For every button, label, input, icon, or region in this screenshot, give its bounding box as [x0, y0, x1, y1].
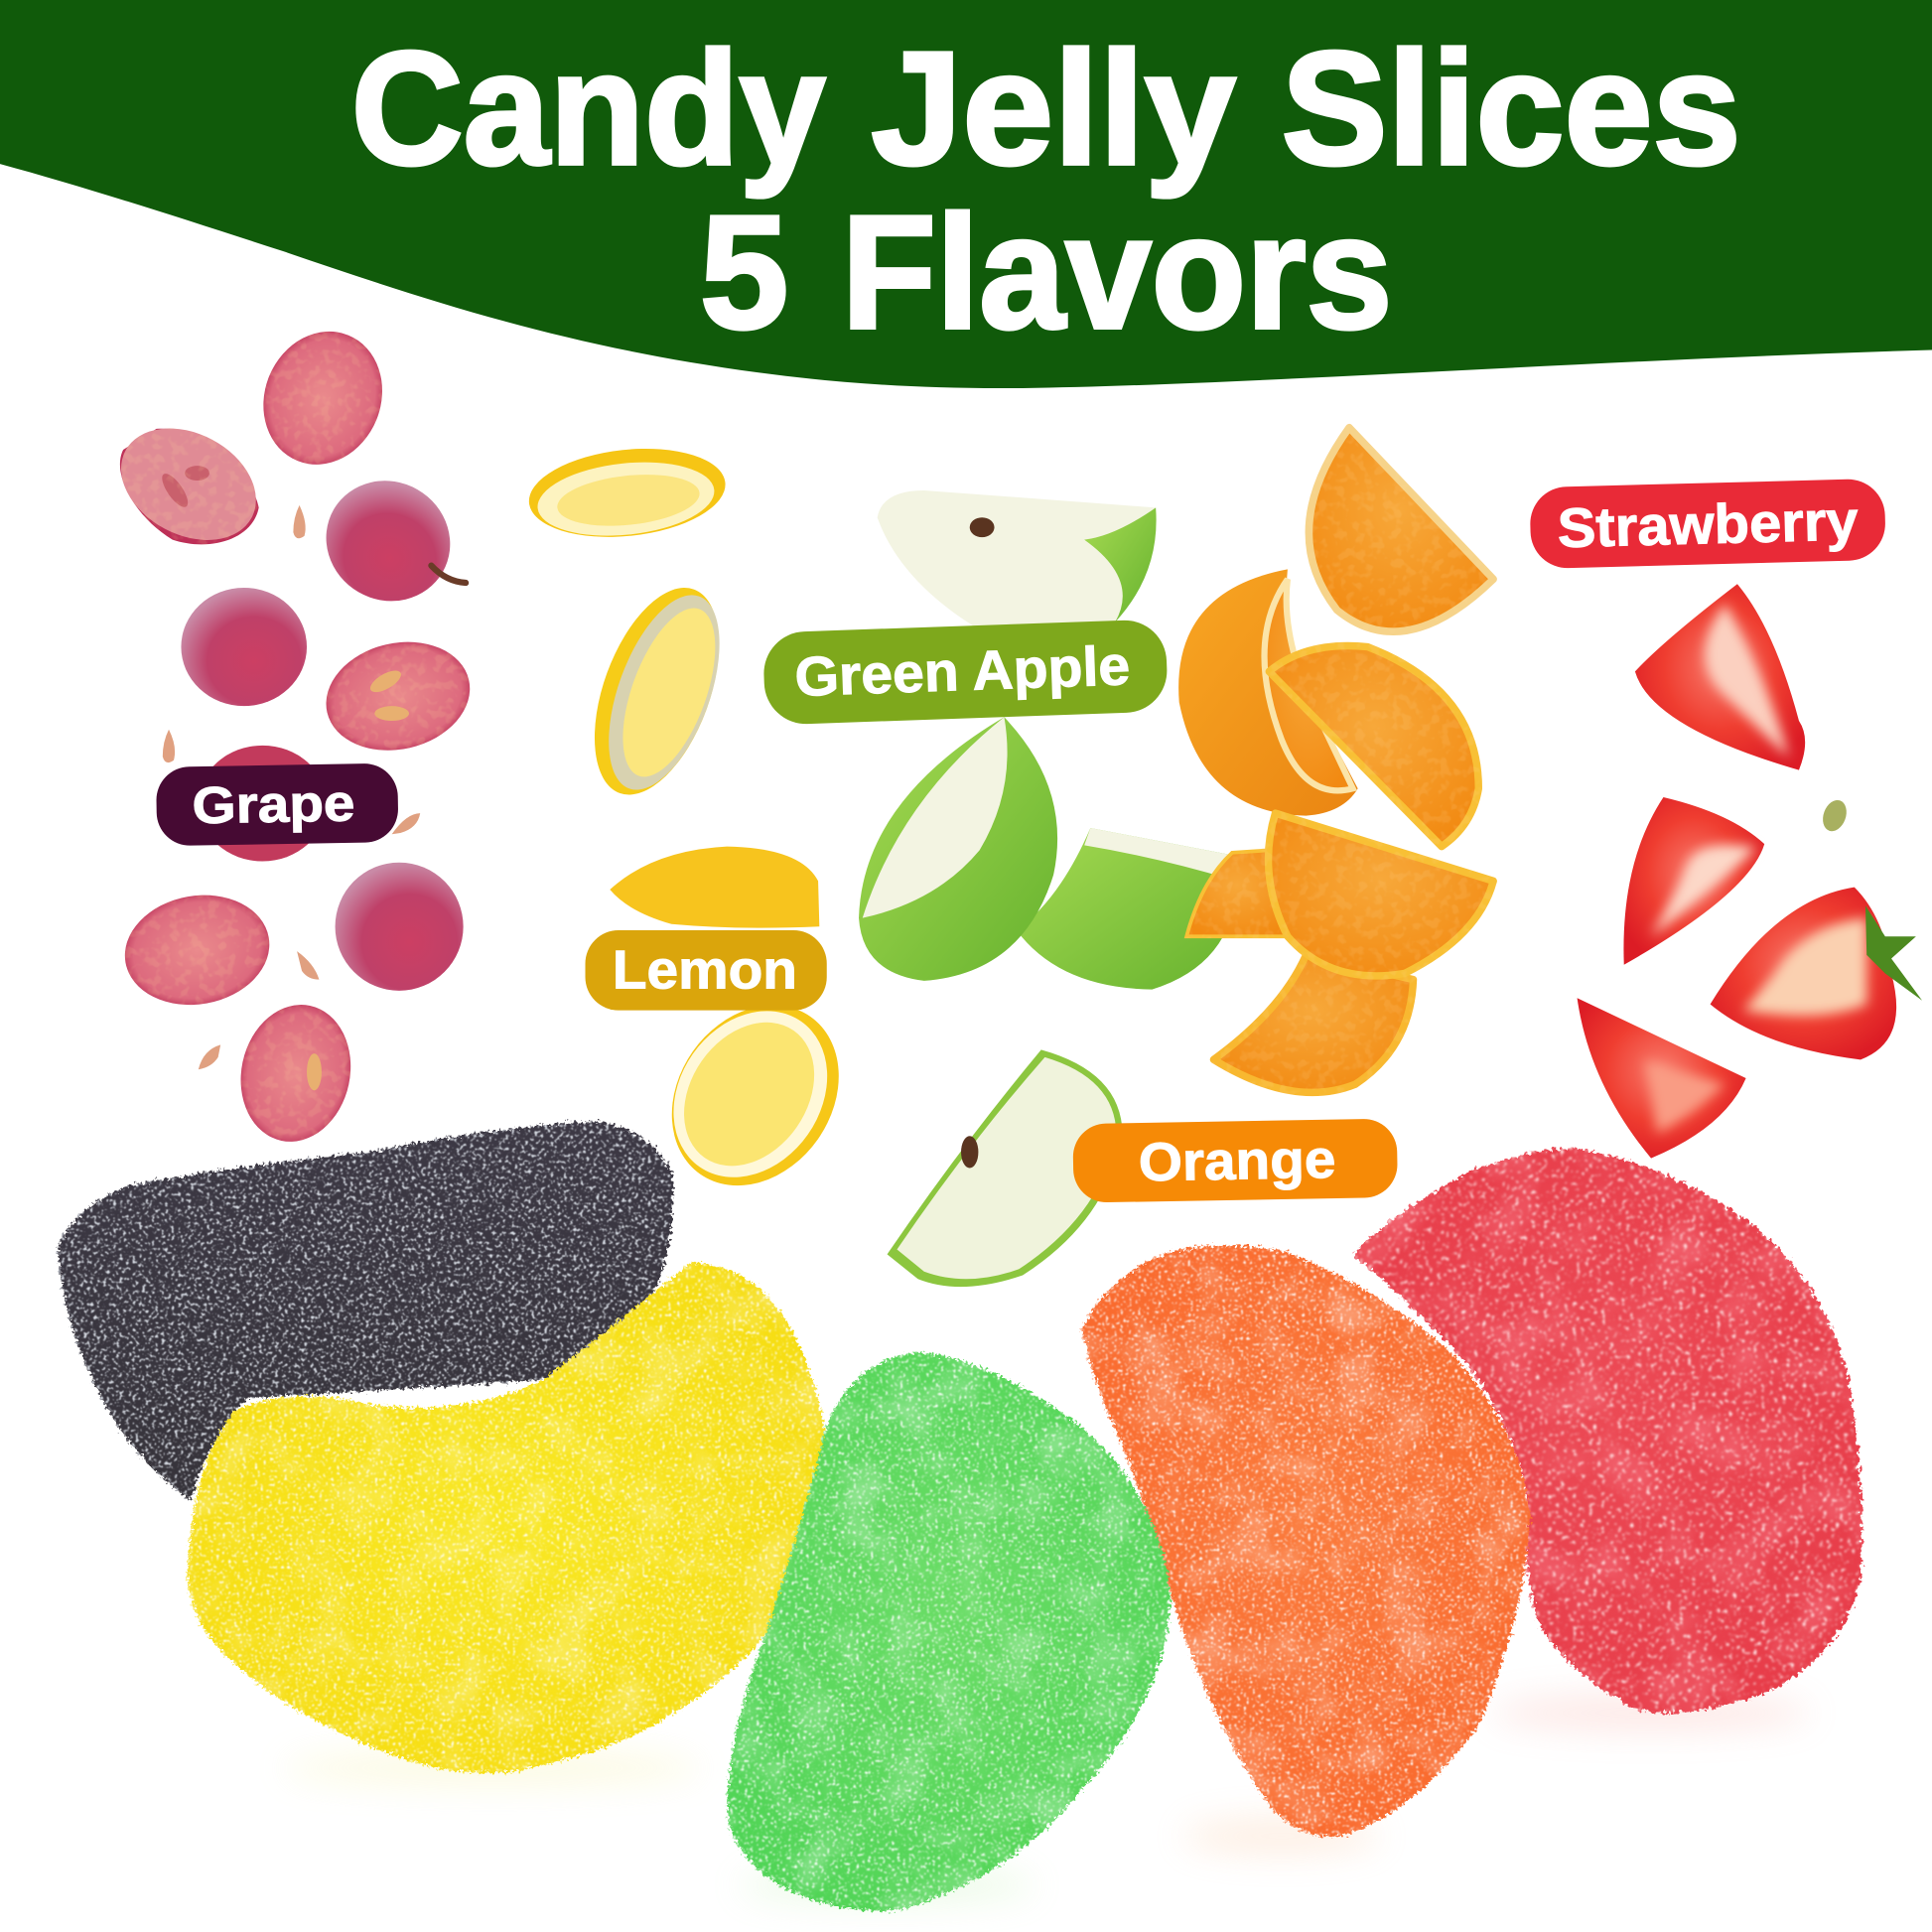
title: Jelly	[871, 19, 1236, 199]
candy: strawberry red	[1353, 1149, 1862, 1713]
green wave banner	[0, 0, 1932, 388]
title: Slices	[1282, 19, 1741, 199]
label: lemon: Lemon	[613, 939, 797, 1000]
orange slices	[1178, 428, 1493, 1092]
label: grape: Grape	[192, 774, 355, 835]
candy: green apple	[727, 1351, 1171, 1911]
title: 5	[700, 183, 788, 362]
label: strawberry	[1529, 479, 1886, 569]
strawberries	[1578, 584, 1922, 1159]
label: green apple	[762, 619, 1169, 726]
title: Candy	[351, 19, 826, 199]
lemon slices	[524, 440, 873, 1218]
label: orange	[1072, 1119, 1398, 1203]
label: lemon	[586, 930, 827, 1011]
label: green apple: Green Apple	[793, 633, 1131, 708]
label: orange: Orange	[1138, 1129, 1336, 1192]
grapes	[101, 314, 481, 1152]
label: strawberry: Strawberry	[1557, 488, 1859, 559]
candy shadows	[283, 1696, 1811, 1902]
title	[351, 19, 1741, 362]
label: grape	[156, 763, 399, 846]
green apple slices	[859, 490, 1239, 1287]
candy: orange	[1082, 1245, 1530, 1837]
title: Flavors	[842, 183, 1392, 362]
candy: grape dark	[58, 1121, 673, 1501]
candy: lemon yellow	[188, 1263, 826, 1773]
